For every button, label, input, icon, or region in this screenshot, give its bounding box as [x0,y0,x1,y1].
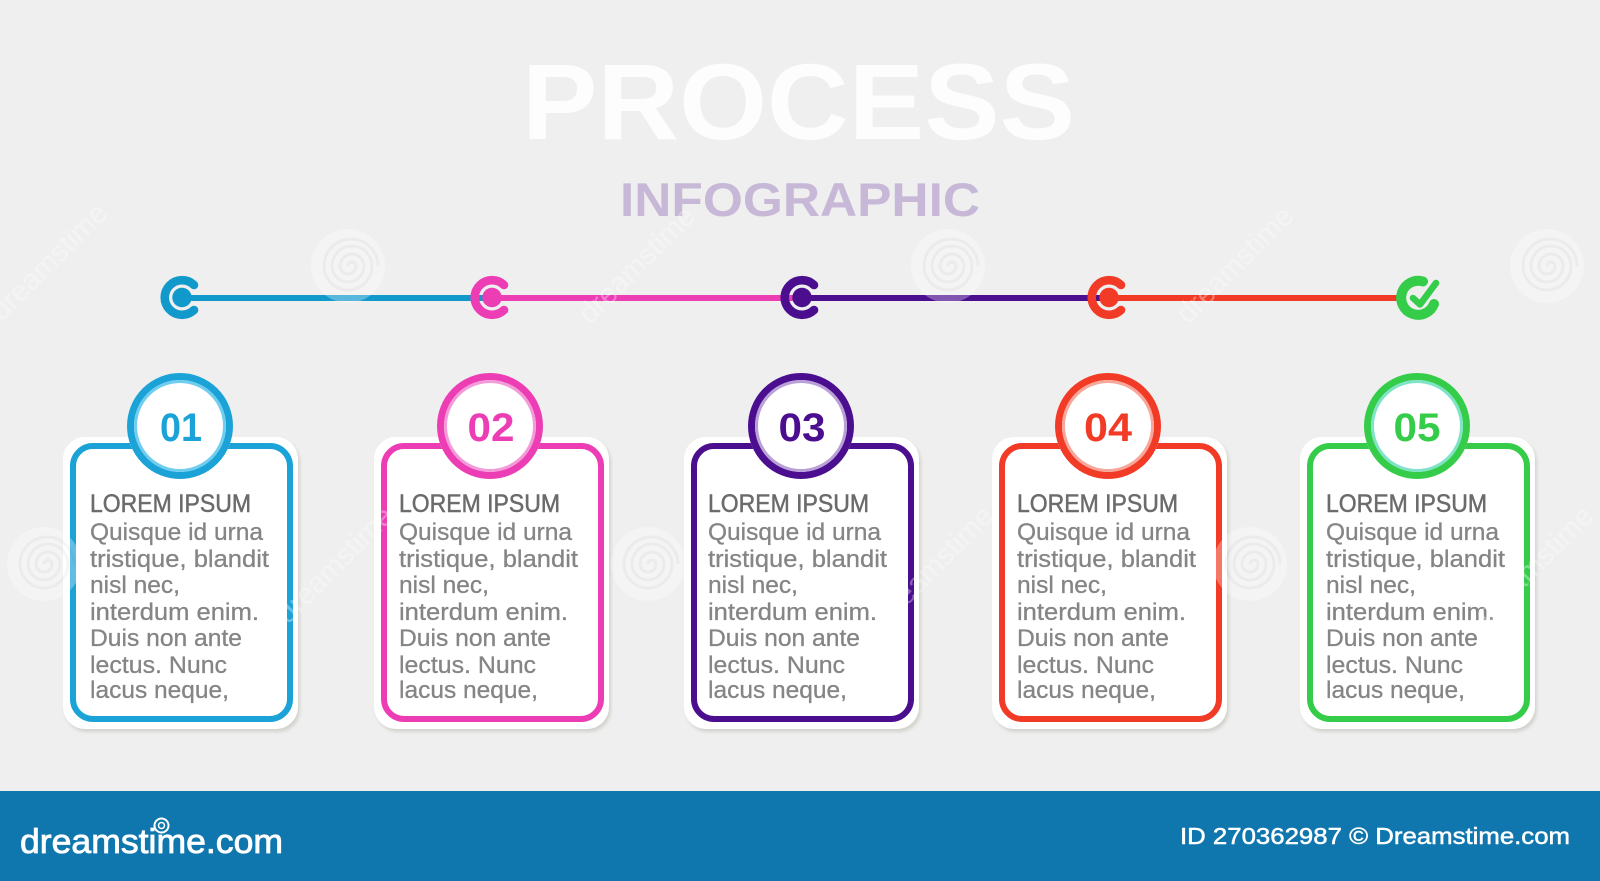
card text 4: Duis non ante [1017,625,1169,652]
card text 1: Duis non ante [90,625,242,652]
card text 1: lacus neque, [90,677,229,704]
timeline [165,280,1436,315]
card 5 [1300,373,1537,732]
number badge 1: 01 [160,406,202,450]
connector line 1 [182,295,492,301]
card text 5: nisl nec, [1326,572,1416,599]
icon: node 3 [785,280,814,315]
number badge 3: 03 [778,406,826,450]
card 1 [63,373,300,732]
card text 4: tristique, blandit [1017,546,1196,573]
card text 5: LOREM IPSUM [1326,490,1487,518]
footer logo: dreamstime.com [20,823,283,861]
watermarks: dreamstime [1170,200,1300,330]
card text 1: interdum enim. [90,599,259,626]
icon: node 1 [165,280,194,315]
number badge 3 [748,373,854,479]
number badge 4: 04 [1084,406,1133,450]
card text 3: tristique, blandit [708,546,887,573]
card text 2: LOREM IPSUM [399,490,560,518]
image id: ID 270362987 © Dreamstime.com [1180,823,1570,849]
card text 5: lectus. Nunc [1326,652,1463,679]
card text 1: tristique, blandit [90,546,269,573]
card text 4: LOREM IPSUM [1017,490,1178,518]
icon: logo spiral [154,818,168,832]
number badge 2 [437,373,543,479]
card text 3: lectus. Nunc [708,652,845,679]
footer band [0,791,1600,881]
title: PROCESS [522,41,1075,162]
card text 1 [90,490,269,704]
icon: node 4 [1092,280,1121,315]
card text 2: nisl nec, [399,572,489,599]
card 2 [374,373,611,732]
icon: node 2 [475,280,504,315]
card text 3: Duis non ante [708,625,860,652]
number badge 4 [1055,373,1161,479]
card text 5 [1326,490,1505,704]
watermarks [0,197,1600,630]
card text 1: lectus. Nunc [90,652,227,679]
card text 4: lectus. Nunc [1017,652,1154,679]
card text 3: nisl nec, [708,572,798,599]
card text 1: nisl nec, [90,572,180,599]
watermarks: dreamstime [870,500,1000,630]
card text 4: Quisque id urna [1017,519,1191,546]
card text 1: LOREM IPSUM [90,490,251,518]
card text 5: lacus neque, [1326,677,1465,704]
number badge 2: 02 [468,406,514,450]
card text 4: nisl nec, [1017,572,1107,599]
card text 4: lacus neque, [1017,677,1156,704]
card text 3 [708,490,887,704]
number badge 1 [127,373,233,479]
subtitle: INFOGRAPHIC [620,173,980,226]
watermarks: dreamstime [270,500,400,630]
card text 2: lacus neque, [399,677,538,704]
card text 4: interdum enim. [1017,599,1186,626]
number badge 5: 05 [1394,406,1440,450]
connector line 2 [492,295,802,301]
card 4 [992,373,1229,732]
card text 2: lectus. Nunc [399,652,536,679]
card text 2: Quisque id urna [399,519,573,546]
card text 2: Duis non ante [399,625,551,652]
card text 5: Duis non ante [1326,625,1478,652]
icon: check node [1401,281,1436,315]
card text 1: Quisque id urna [90,519,264,546]
card text 5: Quisque id urna [1326,519,1500,546]
card text 2 [399,490,578,704]
card text 2: interdum enim. [399,599,568,626]
connector line 3 [802,295,1109,301]
card text 3: LOREM IPSUM [708,490,869,518]
connector line 4 [1109,295,1401,301]
card text 5: interdum enim. [1326,599,1495,626]
card text 4 [1017,490,1196,704]
watermarks: dreamstime [1470,500,1600,630]
card 3 [684,373,921,732]
card text 2: tristique, blandit [399,546,578,573]
card text 3: Quisque id urna [708,519,882,546]
card text 3: interdum enim. [708,599,877,626]
card text 5: tristique, blandit [1326,546,1505,573]
number badge 5 [1364,373,1470,479]
watermarks: dreamstime [572,200,702,330]
card text 3: lacus neque, [708,677,847,704]
